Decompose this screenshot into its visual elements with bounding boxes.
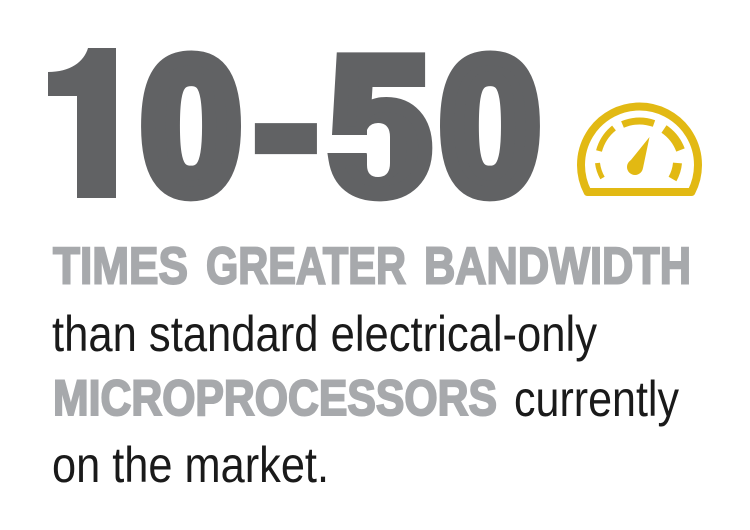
infographic [48,48,702,482]
title: big number [48,48,540,202]
text: times greater bandwidth: BANDWIDTH [424,238,691,296]
title: big number: 5 [330,19,430,233]
text: than standard electrical-only: than standard electrical-only [52,306,597,362]
text: microprocessors currently: MICROPROCESSORS [53,370,497,426]
title: big number: 1 [42,16,149,232]
icon: speedometer gauge [581,107,698,192]
text: microprocessors currently: currently [514,371,679,427]
text: times greater bandwidth [53,238,691,296]
text: times greater bandwidth: GREATER [206,238,406,296]
title: big number: 0 [440,19,540,233]
title: big number: 0 [141,19,241,233]
text: times greater bandwidth: TIMES [53,238,188,296]
text: on the market: on the market. [52,437,329,493]
